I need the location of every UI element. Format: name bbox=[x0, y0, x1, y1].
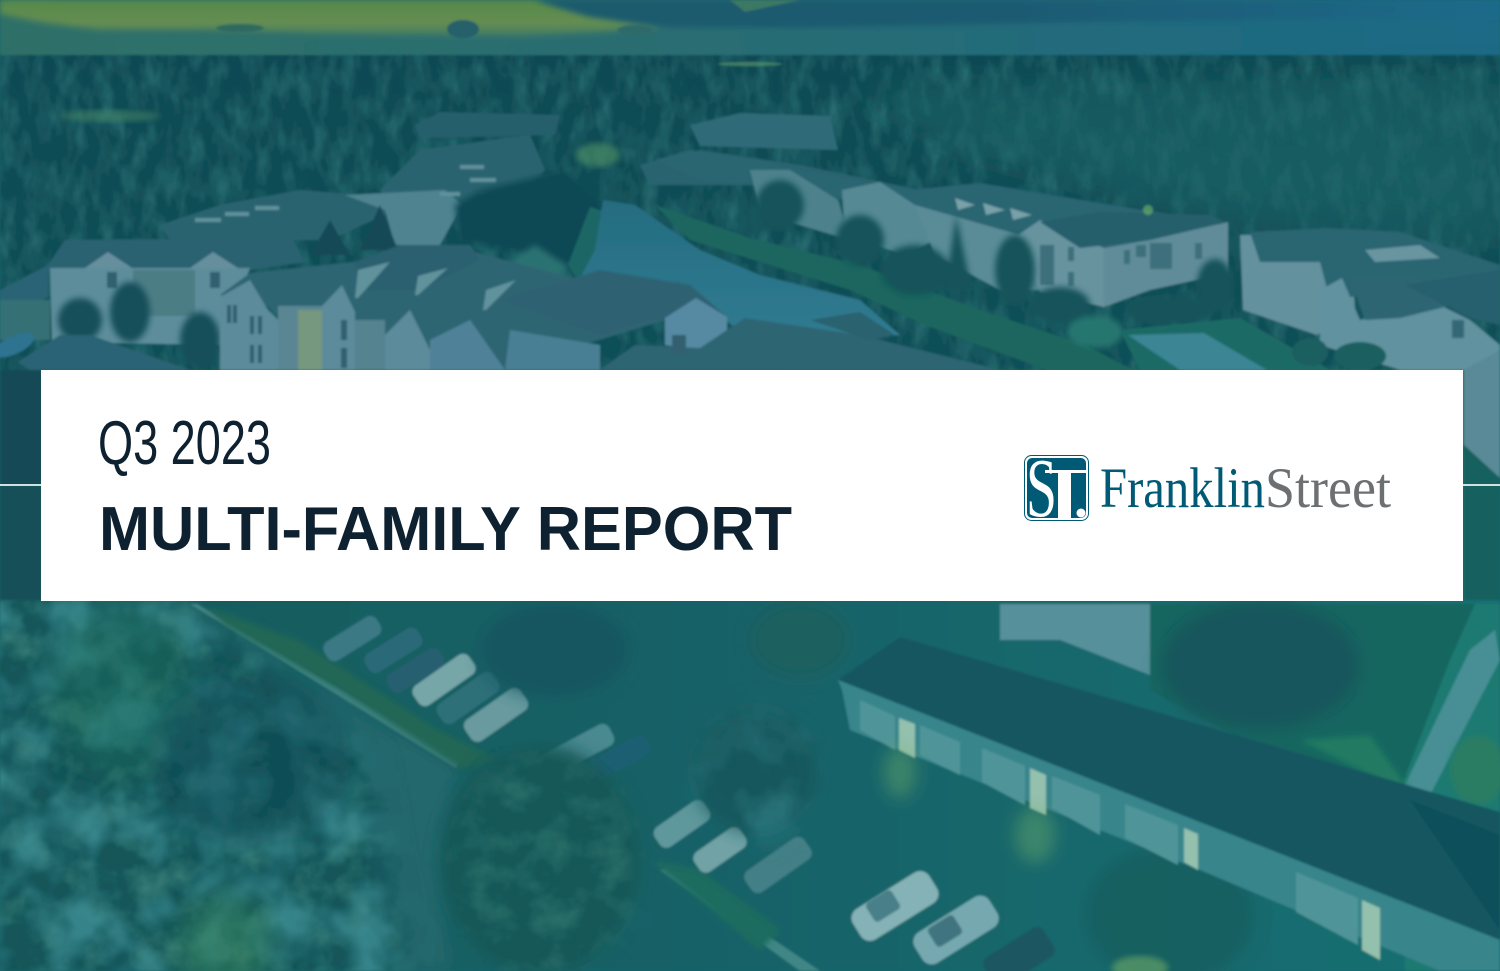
trees beside pond bbox=[310, 170, 606, 280]
left trees bbox=[0, 600, 404, 971]
edges beside panel bbox=[0, 350, 1500, 601]
forest bbox=[0, 55, 1500, 370]
lower photo base bbox=[0, 370, 1500, 971]
left foreground building bbox=[0, 238, 305, 370]
lamp glows bbox=[884, 746, 1055, 863]
parked cars bbox=[320, 613, 1058, 971]
logo wordmark bbox=[1100, 457, 1391, 520]
subtitle: Q3 2023: Q3 2023 bbox=[98, 409, 271, 478]
sky bbox=[0, 0, 1500, 60]
right buildings bbox=[1240, 228, 1500, 370]
logo mark: ST square: S bbox=[1026, 442, 1057, 535]
logo wordmark: Street bbox=[1265, 457, 1391, 520]
title panel bbox=[41, 370, 1463, 601]
right row buildings bbox=[655, 150, 1228, 307]
pond bbox=[579, 200, 900, 345]
curbs bbox=[190, 604, 820, 971]
central street trees bbox=[400, 602, 1255, 971]
central foreground buildings bbox=[220, 245, 1000, 370]
logo wordmark: Franklin bbox=[1100, 457, 1265, 520]
pool deck and lawn bbox=[1120, 318, 1330, 370]
logo: Franklin Street bbox=[1024, 442, 1391, 535]
building and lawn upper right bbox=[1000, 600, 1500, 971]
grass strip bbox=[655, 205, 1133, 370]
far buildings bbox=[160, 112, 980, 245]
hedge bbox=[205, 606, 500, 770]
trees along row bbox=[756, 180, 1233, 348]
road surface bbox=[140, 604, 460, 971]
title: Multi-Family Report: MULTI-FAMILY REPORT bbox=[99, 495, 792, 564]
horizontal white rule behind panel bbox=[0, 484, 1500, 486]
carport long roof and wall bbox=[838, 637, 1500, 971]
